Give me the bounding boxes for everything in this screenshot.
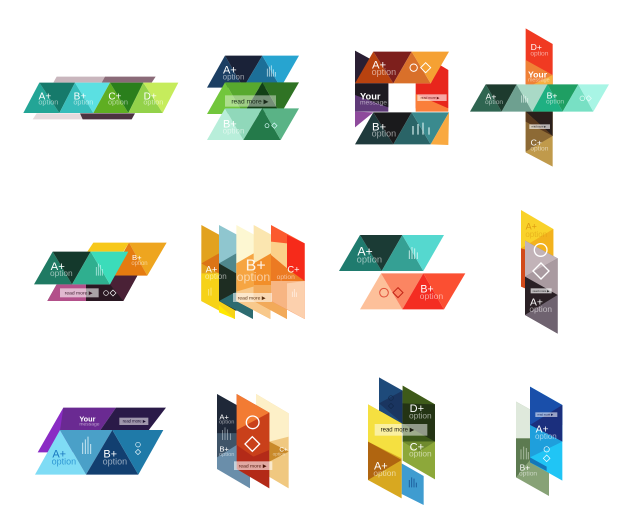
infographic 7: two offset banners teal and red: option [357,254,382,264]
infographic 11: multi-colour strips: option [409,448,432,458]
infographic 11: multi-colour strips: read more ▶ [381,428,415,434]
infographic 7: two offset banners teal and red: A+ [357,245,373,259]
infographic 9: purple and blue two-tier banner: Your [79,415,96,424]
infographic 1: horizontal A B C D banner: A+ [39,91,51,102]
infographic 5: two-tier banner with yellow back: B+ [132,253,142,262]
infographic 6: five slanted vertical strips: option [205,272,227,281]
infographic 9: purple and blue two-tier banner: option [103,456,127,466]
infographic 9: purple and blue two-tier banner: read more ▶ [123,419,147,424]
infographic 6: five slanted vertical strips: C+ [287,264,300,274]
infographic 8: yellow and grey vertical strips: A+ [530,298,543,309]
infographic 12: blue and green strips: read more ▶ [537,413,554,417]
infographic 9: purple and blue two-tier banner: option [52,456,76,466]
infographic 4: cross banner [470,28,609,167]
infographic 2: stacked three-row banner: option [223,126,244,135]
infographic 10: three slanted strips: B+ [219,444,229,453]
infographic 1: horizontal A B C D banner: option [38,98,58,107]
infographic 1: horizontal A B C D banner: option [143,98,163,107]
infographic 10: three slanted strips: option [219,452,234,458]
infographic 4: cross banner: read more ▶ [531,125,547,129]
infographic 6: five slanted vertical strips: option [237,270,270,284]
infographic 9: purple and blue two-tier banner [35,408,166,475]
infographic 10: three slanted strips: C+ [279,446,288,453]
infographic 8: yellow and grey vertical strips: A+ [526,222,537,232]
infographic 3: square frame [355,51,449,145]
infographic 6: five slanted vertical strips: B+ [246,257,266,274]
infographic 12: blue and green strips: A+ [536,425,549,436]
infographic 12: blue and green strips: option [519,471,537,478]
infographic 12: blue and green strips: B+ [520,462,530,472]
infographic 4: cross banner: option [530,50,549,57]
infographic 11: multi-colour strips: C+ [410,441,424,453]
infographic 1: horizontal A B C D banner: option [108,98,128,107]
infographic 7: two offset banners teal and red [339,235,465,309]
infographic 12: blue and green strips: option [535,432,557,441]
infographic 3: square frame: B+ [372,121,387,133]
infographic 9: purple and blue two-tier banner: A+ [52,449,66,461]
infographic 6: five slanted vertical strips: option [277,274,295,281]
infographic 3: square frame: option [372,67,396,77]
infographic 11: multi-colour strips [368,377,435,505]
infographic 11: multi-colour strips: option [409,411,432,421]
infographic 9: purple and blue two-tier banner: message [79,421,100,427]
infographic 2: stacked three-row banner: B+ [223,118,237,130]
infographic 3: square frame: A+ [372,60,387,72]
infographic 8: yellow and grey vertical strips: read more ▶ [533,289,550,293]
infographic 2: stacked three-row banner: option [223,72,244,81]
infographic 11: multi-colour strips: option [373,468,396,478]
infographic 4: cross banner: message [528,77,550,83]
infographic 1: horizontal A B C D banner [23,77,178,119]
infographic 2: stacked three-row banner: read more ▶ [231,98,270,105]
infographic 3: square frame: read more ▶ [421,96,440,100]
infographic 5: two-tier banner with yellow back: option [50,268,73,278]
infographic 6: five slanted vertical strips [201,225,305,319]
infographic 4: cross banner: B+ [547,91,558,101]
infographic 1: horizontal A B C D banner: C+ [108,91,122,102]
infographic 5: two-tier banner with yellow back: A+ [51,261,65,273]
infographic 11: multi-colour strips: D+ [410,403,424,415]
infographic 5: two-tier banner with yellow back [34,243,167,301]
infographic 4: cross banner: Your [528,69,548,79]
infographic 10: three slanted strips: option [219,419,234,425]
infographic 11: multi-colour strips: A+ [374,460,388,472]
infographic 10: three slanted strips: A+ [219,412,229,421]
infographic 4: cross banner: C+ [531,137,542,147]
infographic 10: three slanted strips: read more ▶ [239,463,267,469]
infographic 6: five slanted vertical strips: read more ▶ [238,295,266,301]
infographic 5: two-tier banner with yellow back: option [131,261,148,267]
infographic 7: two offset banners teal and red: option [420,291,443,301]
infographic 3: square frame: option [372,129,396,139]
infographic 5: two-tier banner with yellow back: read more ▶ [65,290,93,296]
infographic 2: stacked three-row banner [207,56,299,140]
infographic 4: cross banner: D+ [531,42,542,52]
first column and first row coordinates [23,56,299,140]
infographic 1: horizontal A B C D banner: option [73,98,93,107]
infographic 8: yellow and grey vertical strips [521,210,558,334]
infographic 10: three slanted strips [217,394,289,488]
infographic 12: blue and green strips [516,387,562,496]
infographic 4: cross banner: option [546,99,564,106]
infographic 4: cross banner: option [530,145,549,152]
infographic 7: two offset banners teal and red: B+ [420,283,434,295]
infographic 10: three slanted strips: option [273,452,286,457]
infographic 2: stacked three-row banner: A+ [223,64,237,76]
infographic 3: square frame: message [360,99,387,106]
infographic 4: cross banner: A+ [486,91,497,101]
infographic 3: square frame: Your [360,91,381,101]
infographic 1: horizontal A B C D banner: B+ [74,91,86,102]
infographic 8: yellow and grey vertical strips: option [529,304,552,314]
infographic 1: horizontal A B C D banner: D+ [144,91,157,102]
infographic 9: purple and blue two-tier banner: B+ [103,449,117,461]
infographic 6: five slanted vertical strips: A+ [206,264,217,274]
infographic 4: cross banner: option [485,99,503,106]
infographic 8: yellow and grey vertical strips: option [525,230,547,239]
